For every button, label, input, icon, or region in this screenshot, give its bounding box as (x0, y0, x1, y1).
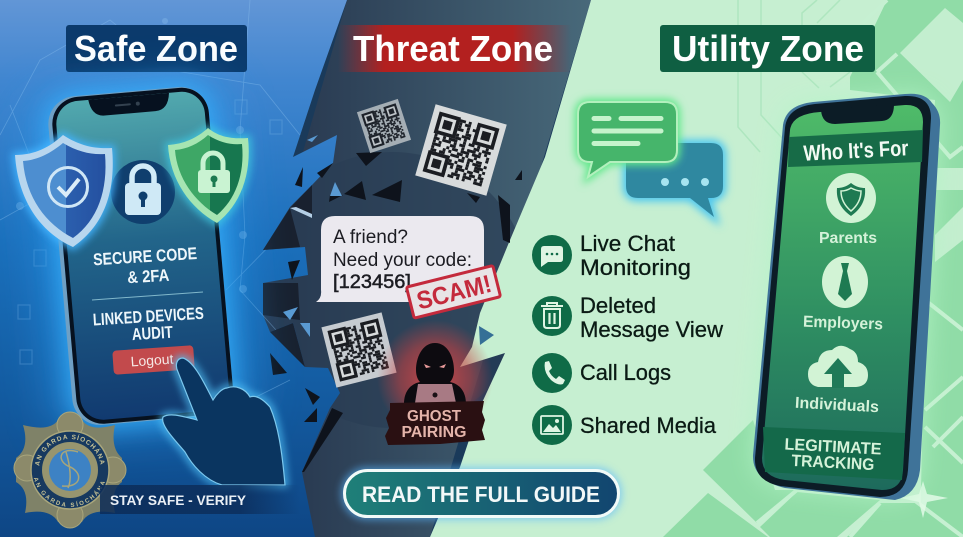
panel: safe zone background (0, 0, 347, 537)
audience: parents: Parents (819, 230, 877, 247)
audience: employers (803, 256, 883, 333)
panel: utility zone background (430, 0, 963, 537)
button: read the full guide: READ THE FULL GUIDE (362, 482, 600, 507)
QR code: small (357, 99, 411, 153)
footer band: LEGITIMATE (784, 435, 882, 459)
text: linked devices audit (92, 304, 205, 346)
icon: blue chat bubble (626, 143, 723, 217)
button: read the full guide (341, 467, 622, 520)
icon: pointing hand (163, 358, 285, 485)
audience: parents (819, 173, 877, 247)
panel: threat zone background (254, 0, 591, 537)
footer band (763, 427, 905, 480)
crest: Garda badge: AN GARDA SÍOCHÁNA (35, 434, 104, 466)
feature: live chat monitoring: Live Chat (580, 231, 675, 256)
button: logout (112, 345, 195, 375)
audience: individuals (795, 346, 879, 416)
icon: hooded hacker (377, 320, 493, 436)
footer band: TRACKING (791, 452, 875, 474)
icon: green shield with lock (168, 128, 249, 223)
stamp: scam: SCAM! (414, 270, 494, 316)
banner: stay safe (100, 485, 300, 514)
feature: shared media: Shared Media (580, 413, 717, 438)
feature: live chat monitoring (532, 231, 691, 280)
feature: live chat monitoring: Monitoring (580, 255, 691, 280)
label: ghost pairing: GHOST (407, 408, 461, 425)
text: linked devices audit: AUDIT (131, 323, 174, 344)
text: secure code and 2FA: & 2FA (127, 266, 170, 287)
phone: who it's for (753, 94, 940, 500)
feature: deleted message view (532, 293, 723, 342)
icon: green chat bubble (578, 102, 677, 177)
header band: Who It's For (803, 135, 909, 166)
feature: shared media (532, 405, 717, 445)
lock badge (111, 160, 175, 224)
audience: individuals: Individuals (795, 395, 879, 416)
message bubble: [123456] (333, 272, 411, 293)
heading: Threat Zone: Threat Zone (353, 28, 553, 69)
text: linked devices audit: LINKED DEVICES (92, 304, 204, 329)
banner: stay safe: STAY SAFE - VERIFY (110, 492, 247, 508)
icon: blue shield with check (15, 135, 113, 247)
phone: secure settings (26, 80, 255, 438)
feature: deleted message view: Deleted (580, 293, 656, 318)
heading: Utility Zone: Utility Zone (672, 28, 864, 69)
QR code: large (415, 104, 507, 196)
shattered glass shards (263, 135, 522, 472)
heading: Safe Zone: Safe Zone (74, 28, 238, 69)
message bubble: Need your code: (333, 250, 472, 271)
feature: call logs (532, 353, 671, 393)
text: secure code and 2FA: SECURE CODE (93, 244, 198, 269)
feature: deleted message view: Message View (580, 317, 723, 342)
crest: Garda badge (14, 412, 126, 528)
label: ghost pairing (385, 401, 485, 445)
QR code: lower (321, 312, 397, 388)
message bubble: A friend? (333, 227, 408, 248)
feature: call logs: Call Logs (580, 360, 671, 385)
text: secure code and 2FA (93, 244, 199, 289)
crest: Garda badge: AN GARDA SÍOCHÁNA (34, 478, 105, 507)
label: ghost pairing: PAIRING (402, 424, 466, 441)
button: logout: Logout (130, 351, 174, 370)
audience: employers: Employers (803, 314, 883, 333)
message bubble (316, 216, 484, 302)
